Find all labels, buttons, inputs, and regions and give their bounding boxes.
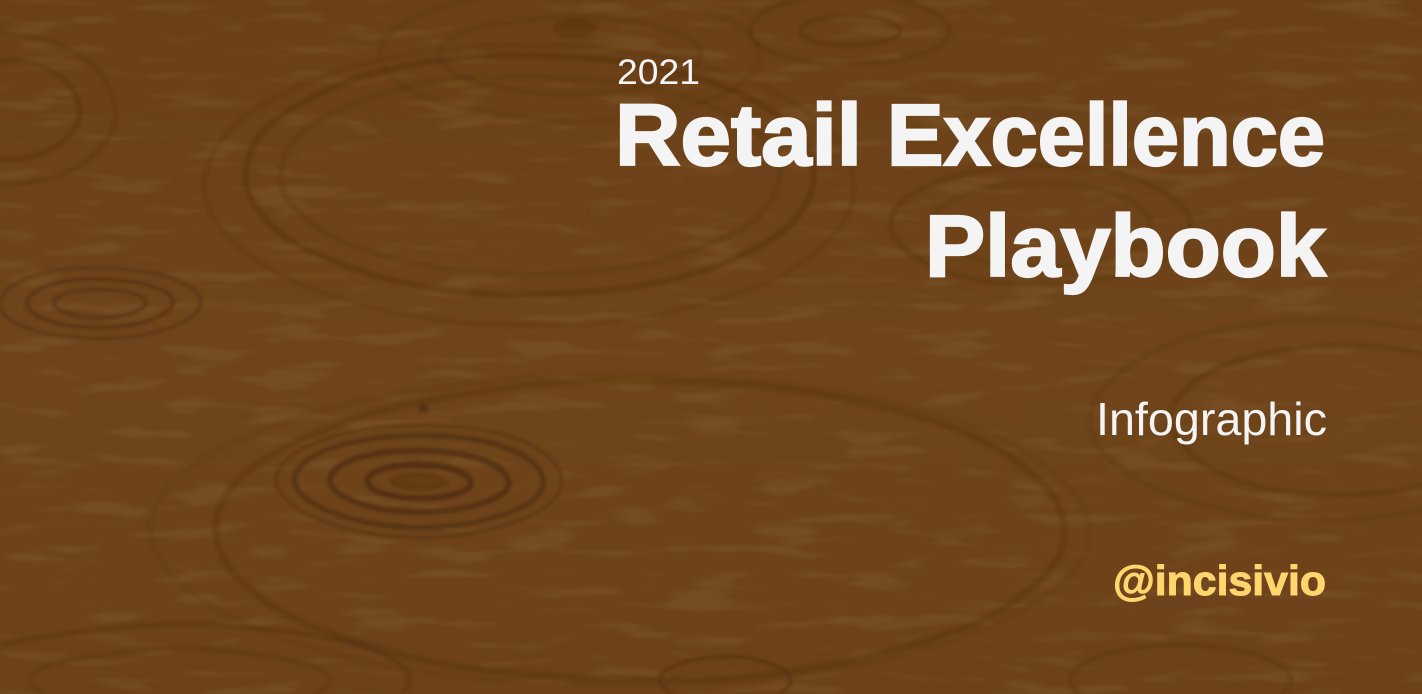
year label: 2021 [617,53,700,92]
handle: @incisivio [1113,557,1326,604]
title line 1 [615,87,1325,184]
ripple: top left corner [0,35,115,185]
subtitle: Infographic [1096,393,1327,445]
ripple: left drop [0,268,200,338]
ripple: large upper centre [205,0,855,325]
title line 1: Retail [615,87,862,184]
ripple: top right [750,0,1190,285]
ripple: lower centre drop [150,375,1090,685]
title line 2: Playbook [925,198,1327,295]
title line 1: Excellence [887,87,1325,184]
ripple: bottom edge [0,625,1290,694]
ripple: right side [1092,320,1422,520]
